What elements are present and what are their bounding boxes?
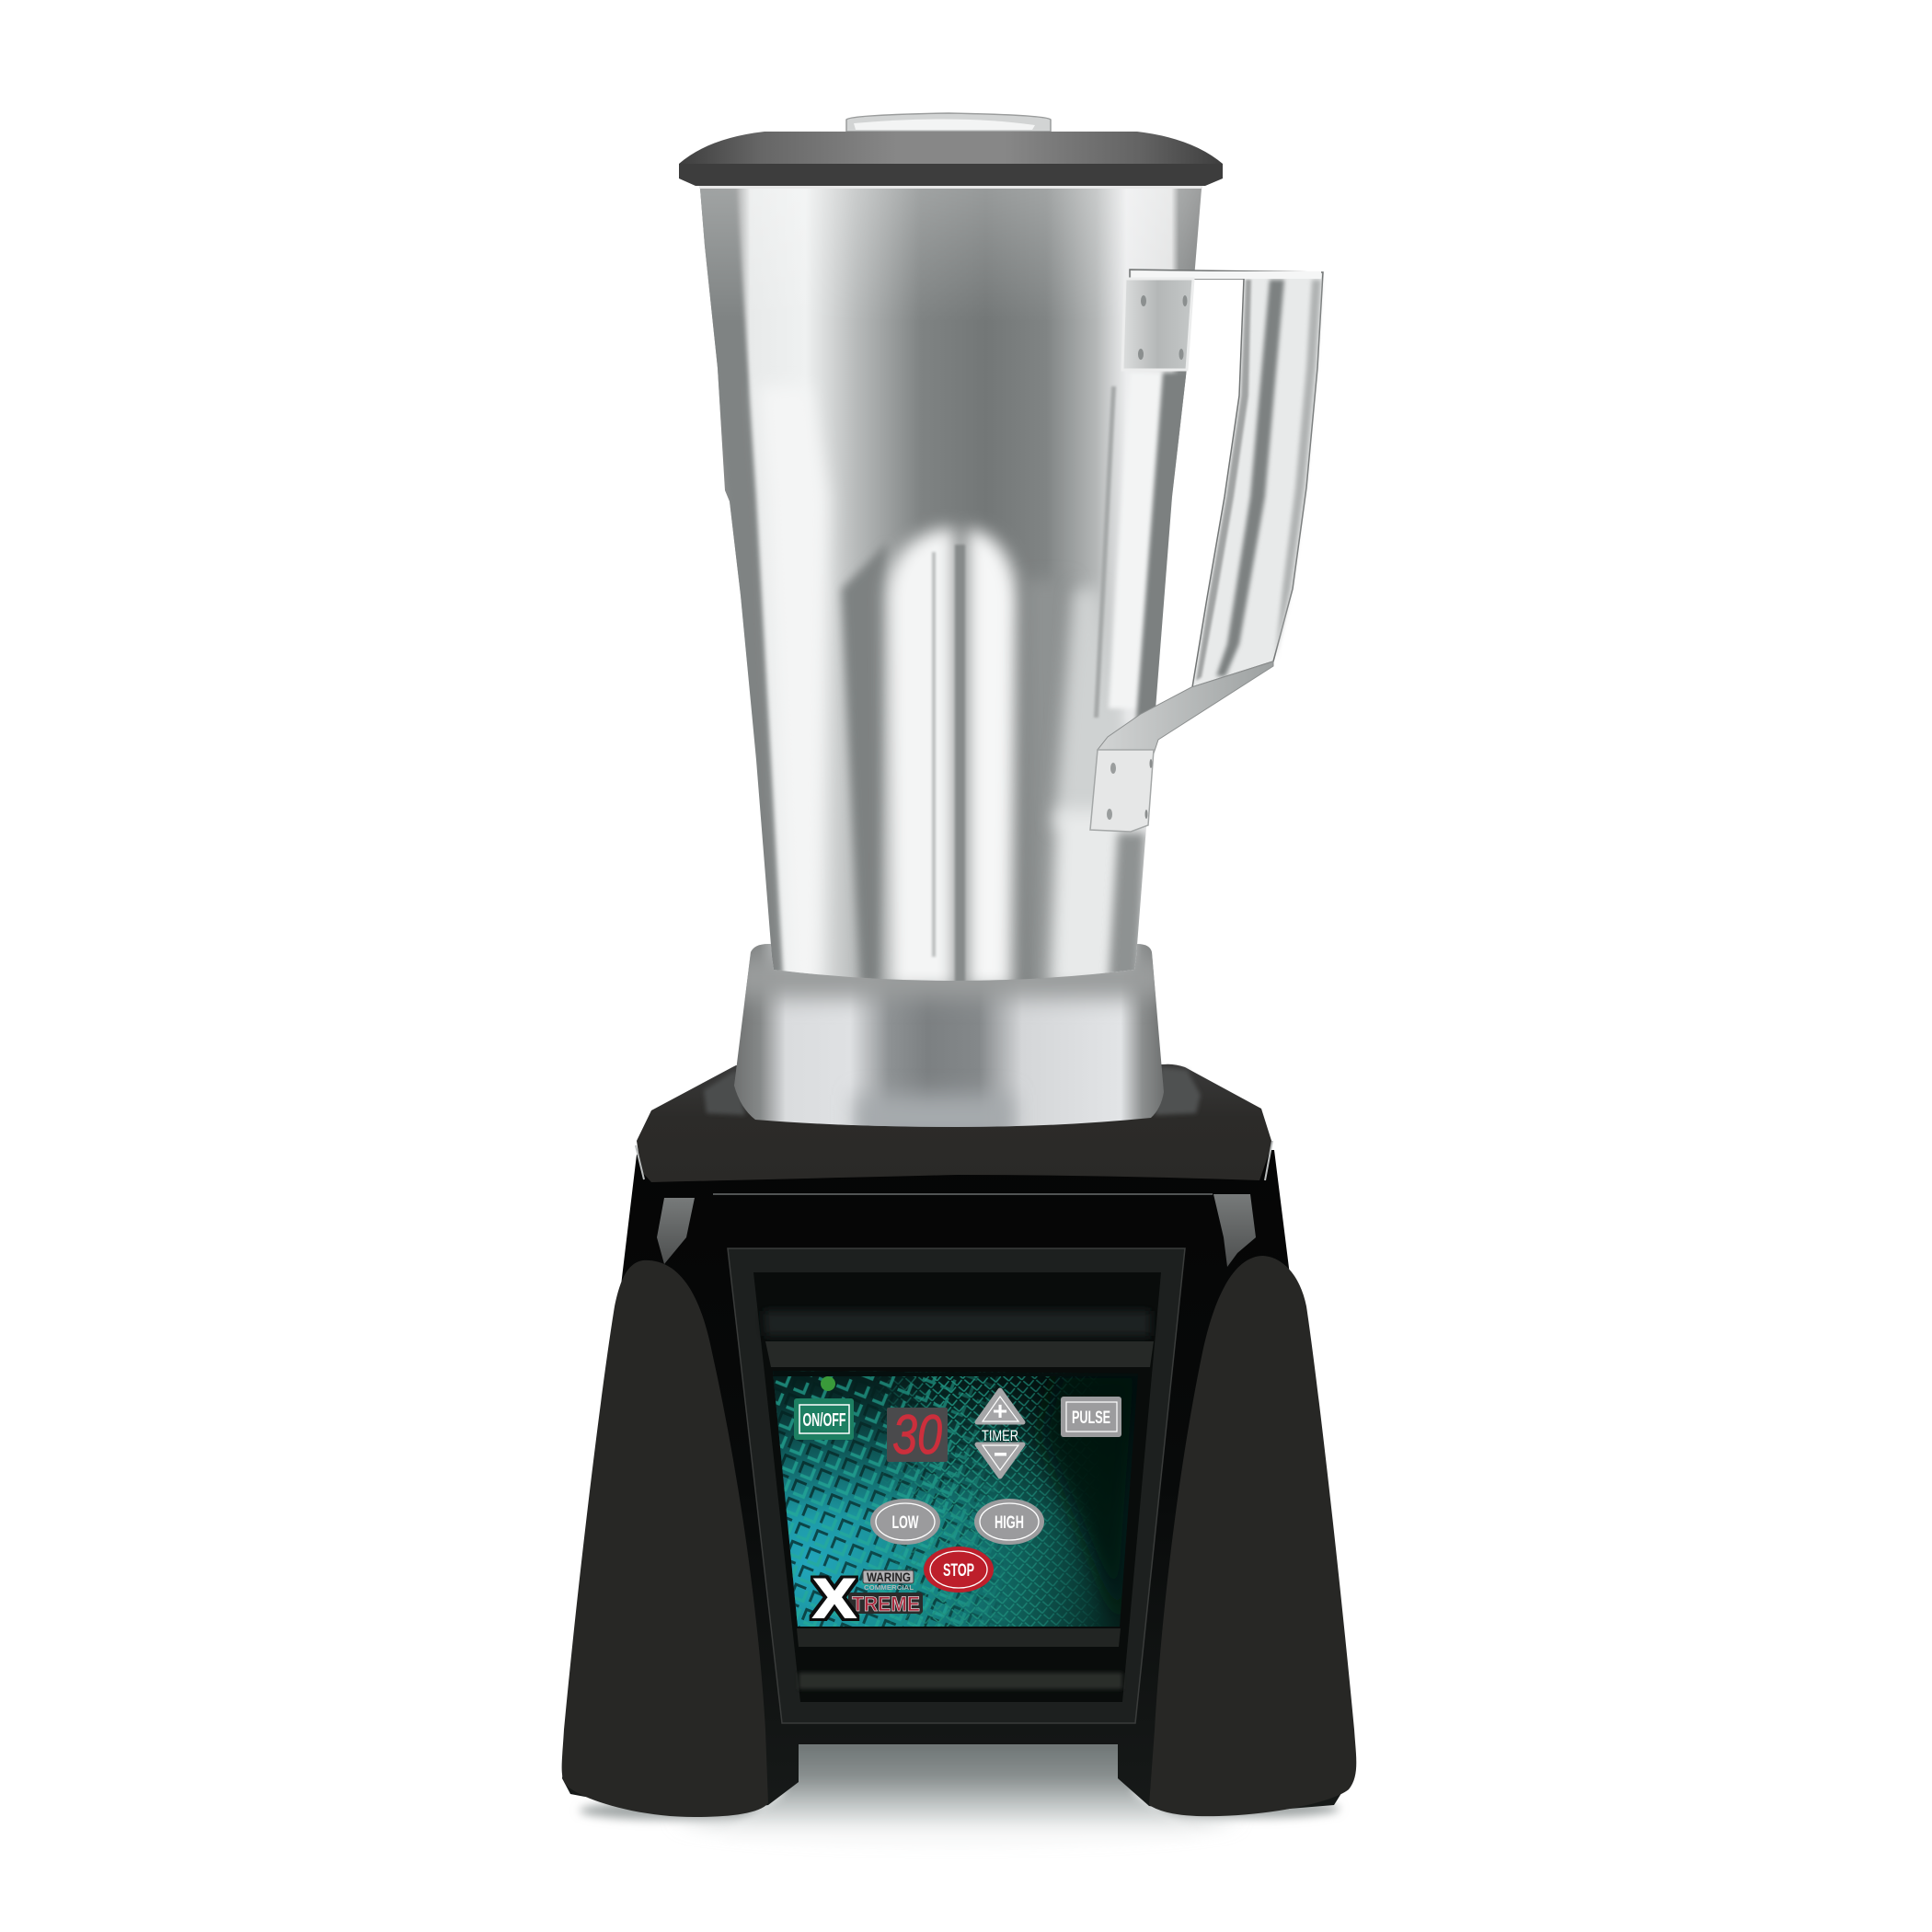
panel background bbox=[773, 1371, 1136, 1627]
low button bbox=[870, 1499, 940, 1545]
stop button: STOP bbox=[943, 1561, 974, 1581]
jar side strap bbox=[1094, 386, 1116, 718]
cap left wing bbox=[704, 1070, 745, 1115]
timer up button bbox=[977, 1390, 1023, 1425]
brand logo bbox=[813, 1568, 923, 1629]
timer label: TIMER bbox=[982, 1427, 1018, 1444]
jar centre highlight arch bbox=[887, 528, 955, 989]
top cap bbox=[637, 1064, 1272, 1182]
steel collar bbox=[727, 944, 1168, 1141]
x mark: X bbox=[813, 1568, 856, 1629]
stop button bbox=[924, 1547, 994, 1593]
on/off button bbox=[794, 1398, 854, 1440]
collar shading bbox=[744, 951, 1156, 1127]
treme plate bbox=[848, 1593, 923, 1614]
timer display: 30 bbox=[892, 1404, 942, 1466]
glossy black housing bbox=[562, 1150, 1352, 1817]
handle inner edge shading bbox=[1196, 280, 1251, 681]
gloss highlight left bbox=[657, 1198, 695, 1264]
lid dome bbox=[679, 132, 1223, 171]
commercial label: COMMERCIAL bbox=[864, 1585, 914, 1592]
recess ridge bottom bbox=[797, 1628, 1121, 1647]
cap edge glints bbox=[636, 1141, 1272, 1180]
handle centre stripe bbox=[1216, 280, 1284, 676]
recess upper glow bbox=[764, 1311, 1150, 1336]
handle top bar highlight bbox=[1132, 271, 1321, 279]
handle upper mounting plate bbox=[1122, 279, 1193, 370]
waring badge: WARING bbox=[867, 1570, 911, 1584]
product illustration: blender bbox=[561, 112, 1356, 1834]
jar shading bbox=[695, 189, 1210, 989]
jar top rim bbox=[699, 184, 1202, 189]
control panel bbox=[773, 1371, 1136, 1627]
high button: HIGH bbox=[995, 1513, 1024, 1533]
front frame bbox=[728, 1248, 1185, 1723]
pulse button: PULSE bbox=[1072, 1409, 1110, 1428]
floor shadow bbox=[580, 1734, 1340, 1844]
knob highlight bbox=[854, 119, 1035, 130]
gloss highlight right bbox=[1213, 1194, 1256, 1267]
handle lower diagonal bbox=[1098, 661, 1273, 753]
handle lower mounting plate bbox=[1090, 750, 1154, 832]
on/off button: ON/OFF bbox=[802, 1410, 846, 1431]
jar lower right reflection bbox=[1053, 589, 1130, 828]
gloss line bbox=[713, 1193, 1213, 1195]
power LED bbox=[821, 1376, 835, 1391]
treme wordmark: TREME bbox=[852, 1593, 920, 1616]
high button bbox=[974, 1499, 1044, 1545]
handle outer shading bbox=[1275, 280, 1321, 659]
timer down button bbox=[977, 1444, 1023, 1477]
left foot pad bbox=[562, 1260, 768, 1817]
jar top sheen bbox=[700, 189, 1202, 291]
low button: LOW bbox=[892, 1513, 919, 1533]
lid rim bbox=[679, 164, 1223, 186]
cap right wing bbox=[1155, 1067, 1201, 1115]
timer up button: + bbox=[993, 1397, 1007, 1425]
recess ridge top bbox=[765, 1341, 1154, 1367]
handle bbox=[1098, 270, 1323, 753]
pulse button bbox=[1061, 1397, 1121, 1437]
right foot pad bbox=[1149, 1256, 1356, 1816]
frame recess bbox=[753, 1272, 1161, 1702]
lid bbox=[679, 113, 1223, 186]
lid clear knob bbox=[846, 113, 1051, 132]
stainless steel jar bbox=[695, 184, 1210, 989]
handle top bar and arm bbox=[1130, 270, 1323, 687]
base body bbox=[562, 1064, 1356, 1817]
recess lower glow bbox=[799, 1673, 1122, 1689]
